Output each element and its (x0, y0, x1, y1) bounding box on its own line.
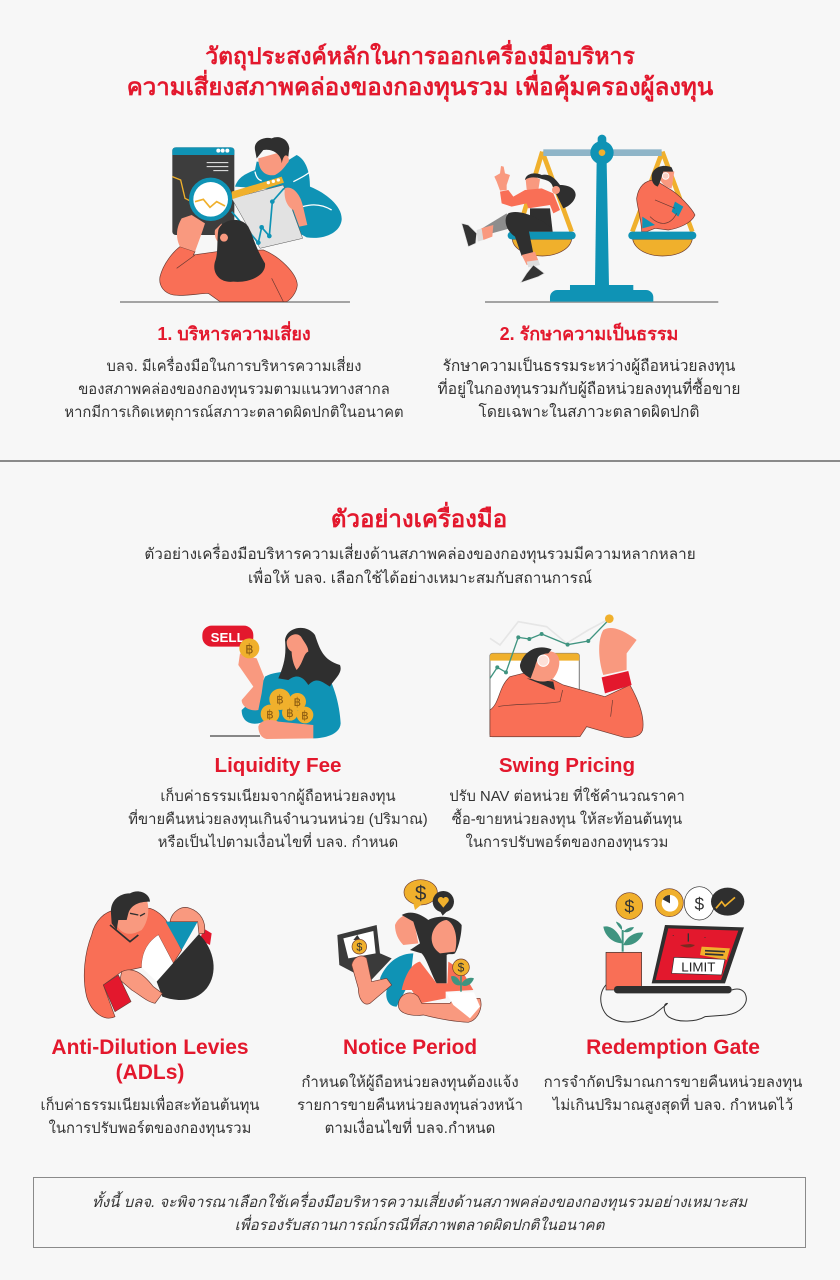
heading: tool examples: ตัวอย่างเครื่องมือ (331, 506, 507, 533)
title (127, 40, 714, 102)
text: fairness: ที่อยู่ในกองทุนรวมกับผู้ถือหน่วยลงทุนที่ซื้อขาย (438, 381, 740, 398)
text: Notice Period: ตามเงื่อนไขที่ บลจ.กำหนด (325, 1120, 495, 1137)
text: tool intro: ตัวอย่างเครื่องมือบริหารความเสี่ยงด้านสภาพคล่องของกองทุนรวมมีความหลากหลาย (144, 546, 696, 563)
text: risk management (64, 356, 404, 421)
icon: woman selling coins (202, 626, 341, 739)
heading: Anti-Dilution Levies: (ADLs) (116, 1061, 184, 1084)
text: fairness (438, 356, 740, 421)
icon: balance scale with investors (462, 135, 718, 302)
text: tool intro (144, 543, 696, 587)
heading: fairness: 2. รักษาความเป็นธรรม (500, 324, 678, 344)
icon: two investors with bubbles (337, 880, 481, 1022)
text: Swing Pricing (449, 786, 685, 851)
text: Notice Period: กำหนดให้ผู้ถือหน่วยลงทุนต้องแจ้ง (301, 1074, 519, 1091)
title: วัตถุประสงค์หลักในการออกเครื่องมือบริหาร (205, 43, 635, 69)
icon: analysts with magnifier and chart (120, 137, 350, 302)
text: Redemption Gate (544, 1074, 802, 1114)
text: Notice Period: รายการขายคืนหน่วยลงทุนล่วงหน้า (297, 1097, 523, 1114)
heading: risk management: 1. บริหารความเสี่ยง (157, 324, 311, 344)
text: Liquidity Fee: ที่ขายคืนหน่วยลงทุนเกินจำนวนหน่วย (ปริมาณ) (128, 812, 428, 828)
text: risk management: ของสภาพคล่องของกองทุนรวมตามแนวทางสากล (78, 382, 390, 398)
title: ความเสี่ยงสภาพคล่องของกองทุนรวม เพื่อคุ้มครองผู้ลงทุน (127, 74, 713, 101)
icon: woman selling coins: ฿ (286, 706, 294, 720)
icon: man holding pie chart (84, 891, 214, 1018)
icon: woman selling coins: ฿ (276, 693, 284, 707)
icon: woman selling coins: ฿ (245, 642, 254, 657)
callout: ทั้งนี้ บลจ. จะพิจารณาเลือกใช้เครื่องมือบริหารความเสี่ยงด้านสภาพคล่องของกองทุนรวมอย่างเหมาะสม (92, 1194, 747, 1211)
text: fairness: โดยเฉพาะในสภาวะตลาดผิดปกติ (479, 404, 699, 421)
text: Notice Period (297, 1074, 523, 1137)
icon: two investors with bubbles: $ (415, 882, 427, 905)
heading: Swing Pricing: Swing Pricing (499, 754, 635, 777)
text: tool intro: เพื่อให้ บลจ. เลือกใช้ได้อย่างเหมาะสมกับสถานการณ์ (248, 570, 592, 587)
icon: two investors with bubbles: $ (458, 961, 465, 975)
text: ADLs (41, 1095, 260, 1137)
icon: woman selling coins: ฿ (266, 707, 274, 721)
icon: laptop with limit sign: $ (624, 897, 634, 917)
text: Swing Pricing: ซื้อ-ขายหน่วยลงทุน ให้สะท้อนต้นทุน (452, 812, 682, 828)
icon: man with chart (490, 614, 643, 738)
callout (33, 1177, 806, 1248)
heading: Anti-Dilution Levies: Anti-Dilution Levies (51, 1036, 249, 1059)
text: Redemption Gate: การจำกัดปริมาณการขายคืนหน่วยลงทุน (544, 1074, 802, 1091)
text: Redemption Gate: ไม่เกินปริมาณสูงสุดที่ บลจ. กำหนดไว้ (553, 1097, 793, 1114)
text: fairness: รักษาความเป็นธรรมระหว่างผู้ถือหน่วยลงทุน (443, 358, 735, 375)
text: ADLs: ในการปรับพอร์ตของกองทุนรวม (49, 1121, 251, 1137)
heading: Redemption Gate: Redemption Gate (586, 1036, 760, 1059)
text: Swing Pricing: ในการปรับพอร์ตของกองทุนรวม (466, 835, 668, 851)
text: ADLs: เก็บค่าธรรมเนียมเพื่อสะท้อนต้นทุน (41, 1098, 259, 1114)
text: Liquidity Fee: เก็บค่าธรรมเนียมจากผู้ถือหน่วยลงทุน (160, 789, 396, 805)
text: Liquidity Fee: หรือเป็นไปตามเงื่อนไขที่ บลจ. กำหนด (158, 835, 398, 851)
heading: Notice Period: Notice Period (343, 1036, 477, 1059)
text: risk management: บลจ. มีเครื่องมือในการบริหารความเสี่ยง (107, 359, 361, 375)
text: risk management: หากมีการเกิดเหตุการณ์สภาวะตลาดผิดปกติในอนาคต (64, 405, 404, 421)
text: Swing Pricing: ปรับ NAV ต่อหน่วย ที่ใช้คำนวณราคา (449, 789, 685, 805)
icon: laptop with limit sign: LIMIT (681, 959, 715, 974)
icon: woman selling coins: ฿ (294, 695, 301, 709)
icon: laptop with limit sign: $ (695, 894, 705, 914)
icon: two investors with bubbles: $ (356, 942, 362, 954)
text: Liquidity Fee (128, 787, 428, 851)
heading: Anti-Dilution Levies (51, 1036, 249, 1084)
icon: laptop with limit sign (601, 887, 746, 1022)
icon: woman selling coins: ฿ (301, 708, 309, 722)
heading: Liquidity Fee: Liquidity Fee (214, 754, 342, 777)
icon: woman selling coins: SELL (211, 630, 245, 645)
callout: เพื่อรองรับสถานการณ์กรณีที่สภาพตลาดผิดปกติในอนาคต (235, 1217, 604, 1234)
